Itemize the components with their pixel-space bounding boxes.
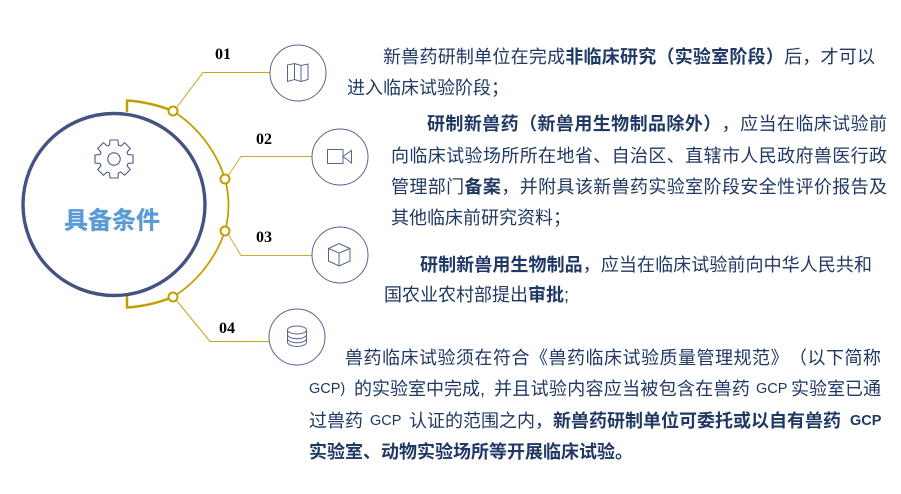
central circle xyxy=(23,114,205,296)
gold arc xyxy=(127,100,228,308)
connector 03 xyxy=(228,234,312,256)
text block 4: 实验室、动物实验场所等开展临床试验。 xyxy=(309,442,633,462)
text block 4: 认证的范围之内， xyxy=(409,411,553,431)
node 03 xyxy=(220,226,230,236)
text block 4: GCP xyxy=(370,413,401,429)
text block 4: 并且试验内容应当被包含在兽药 xyxy=(494,379,750,399)
text block 2: 研制新兽药（新兽用生物制品除外），应当在临床试验前 xyxy=(427,114,887,134)
icon: gear xyxy=(95,140,133,178)
text block 4: 的实验室中完成, xyxy=(354,379,485,399)
text block 2 xyxy=(391,114,887,228)
text block 2: 管理部门备案，并附具该新兽药实验室阶段安全性评价报告及 xyxy=(391,177,887,197)
title: 具备条件 xyxy=(64,208,160,234)
number 03: 03 xyxy=(256,229,272,246)
text block 1: 新兽药研制单位在完成非临床研究（实验室阶段）后，才可以 xyxy=(383,47,875,67)
text block 4: 兽药临床试验须在符合《兽药临床试验质量管理规范》（以下简称 xyxy=(345,348,881,368)
node 02 xyxy=(220,174,230,184)
number 04: 04 xyxy=(219,320,235,337)
text block 4: GCP xyxy=(756,381,787,397)
icon: map xyxy=(270,45,326,101)
icon: video camera xyxy=(312,129,368,185)
text block 4: GCP xyxy=(850,413,881,429)
text block 1: 进入临床试验阶段； xyxy=(347,78,509,98)
text block 2: 向临床试验场所所在地省、自治区、直辖市人民政府兽医行政 xyxy=(391,146,887,166)
text block 3 xyxy=(384,255,872,305)
icon: cube xyxy=(312,227,368,283)
number 01: 01 xyxy=(215,46,231,63)
text block 3: 研制新兽用生物制品，应当在临床试验前向中华人民共和 xyxy=(420,255,872,275)
text block 4: GCP) xyxy=(309,381,345,397)
connector 01 xyxy=(177,72,270,107)
text block 4 xyxy=(309,348,881,462)
connector 02 xyxy=(228,156,312,176)
connector 04 xyxy=(177,301,269,342)
text block 4: 过兽药 xyxy=(309,411,363,431)
number 02: 02 xyxy=(256,131,272,148)
text block 2: 其他临床前研究资料； xyxy=(391,208,571,228)
icon: database xyxy=(269,309,325,365)
text block 3: 国农业农村部提出审批; xyxy=(384,285,569,305)
text block 1 xyxy=(347,47,875,98)
text block 4: 实验室已通 xyxy=(791,379,881,399)
text block 4: 新兽药研制单位可委托或以自有兽药 xyxy=(553,411,841,431)
node 01 xyxy=(168,106,178,116)
node 04 xyxy=(168,292,178,302)
